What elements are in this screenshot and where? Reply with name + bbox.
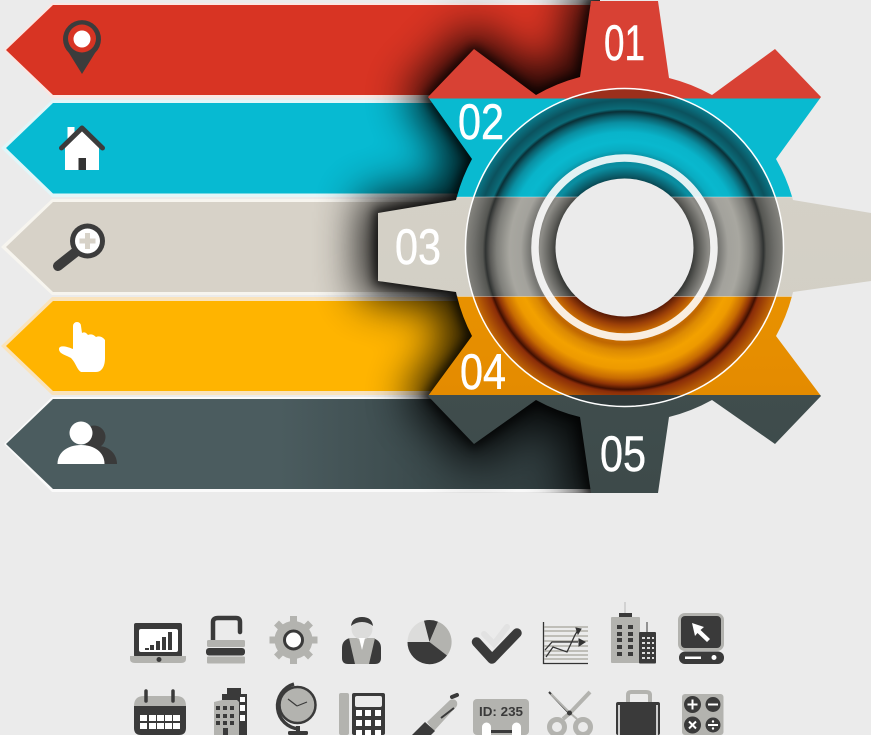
gear hole <box>556 178 694 316</box>
icon: computer cursor <box>678 613 724 664</box>
number 05: 05 <box>600 426 646 482</box>
number 01: 01 <box>604 15 645 71</box>
icon: id badge: ID: 235 <box>479 704 523 719</box>
icon: businessman <box>342 617 381 664</box>
icon: check mark <box>476 627 517 659</box>
icon: open lock <box>206 618 245 664</box>
ribbons <box>1 3 620 492</box>
gear band 04 orange <box>428 296 820 395</box>
gear <box>378 1 871 493</box>
icon: laptop chart <box>130 623 186 663</box>
icon: magnifier <box>58 224 105 266</box>
icon: id badge <box>473 699 529 735</box>
icon: globe clock <box>278 684 316 735</box>
ribbon 03 beige <box>1 199 460 295</box>
icon: pen <box>412 695 457 735</box>
icon: pointing hand <box>59 322 105 372</box>
icon: line chart <box>544 622 588 664</box>
icon: math symbols <box>682 694 724 735</box>
icon: house <box>62 127 102 170</box>
icon: people <box>58 422 117 464</box>
gear band 02 cyan <box>429 98 820 197</box>
ribbon 04 orange <box>1 297 490 395</box>
number 04: 04 <box>460 344 506 400</box>
inner white ring <box>535 158 714 337</box>
icon: city buildings <box>611 602 656 664</box>
gear shadow on ribbons <box>324 0 600 493</box>
ribbon 05 slate <box>4 397 620 492</box>
ribbon 02 cyan <box>1 100 490 197</box>
icon: map pin <box>63 20 101 74</box>
icon: scissors <box>549 692 590 734</box>
number 02: 02 <box>458 94 504 150</box>
gear band 01 red <box>428 1 821 98</box>
icon: calculator <box>339 693 385 735</box>
icon: calendar <box>134 691 186 735</box>
icon: briefcase <box>616 692 660 735</box>
icon: cog <box>270 616 318 664</box>
outer white ring <box>466 88 784 406</box>
number 03: 03 <box>395 219 441 275</box>
ribbon 01 red <box>4 3 600 98</box>
icon: office building <box>214 688 247 735</box>
gear band 05 slate <box>428 395 821 493</box>
icon: pie chart <box>407 620 452 664</box>
gear band 03 beige <box>378 197 871 296</box>
